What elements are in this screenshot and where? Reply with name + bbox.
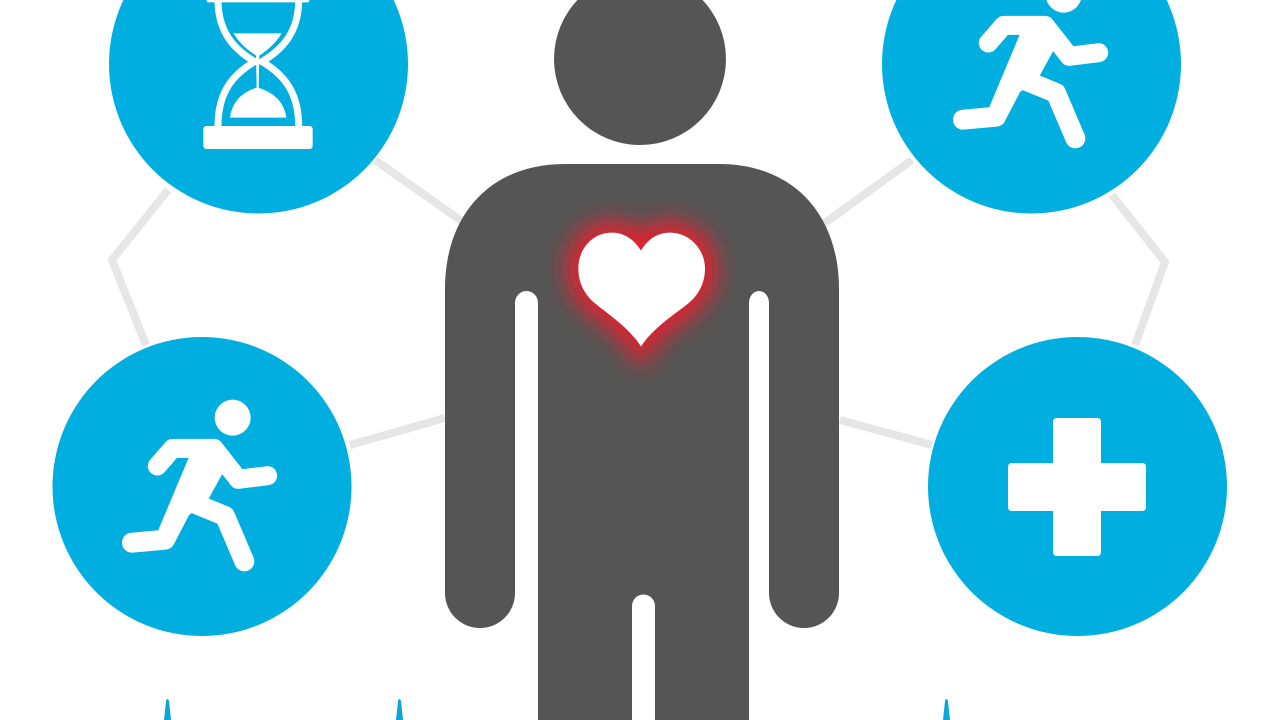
- circle: hourglass: [109, 0, 408, 214]
- figure body: [445, 164, 839, 720]
- figure head: [554, 0, 726, 145]
- icon: heart: [578, 233, 705, 347]
- icon: cross: [1008, 418, 1146, 556]
- icon: hourglass: [203, 0, 313, 149]
- pulse line spikes: [164, 699, 950, 720]
- heart glow: [578, 233, 705, 347]
- circle: runner bottom left: [52, 337, 352, 636]
- circle: medical cross: [928, 337, 1227, 636]
- circle: runner top right: [882, 0, 1181, 214]
- human figure: [445, 0, 839, 720]
- icon: runner: [132, 400, 268, 561]
- icon: runner: [963, 0, 1099, 138]
- connector lines: [112, 160, 1165, 445]
